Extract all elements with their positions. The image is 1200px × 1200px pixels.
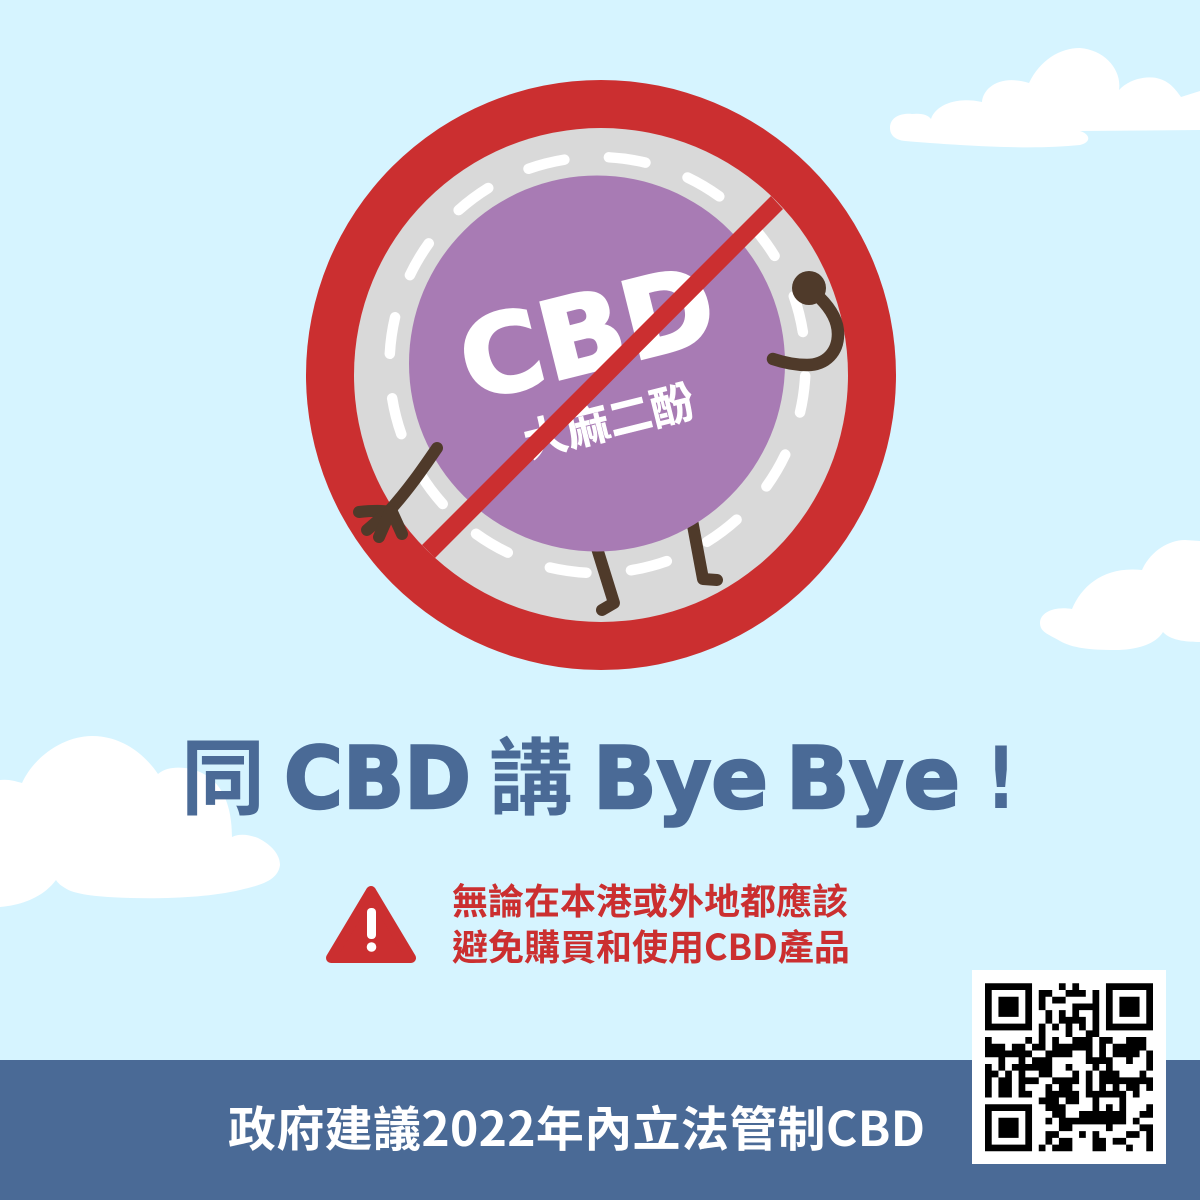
banner text: 政府建議2022年內立法管制CBD bbox=[228, 1090, 925, 1160]
QR code bbox=[972, 970, 1166, 1164]
red slash bbox=[422, 196, 783, 558]
cloud: top right bbox=[890, 48, 1200, 147]
title: Bye bbox=[593, 729, 768, 829]
dashed white ring bbox=[379, 146, 816, 584]
bottom banner bbox=[0, 1060, 1200, 1200]
Chinese label: cannabidiol: 大麻二酚 bbox=[516, 366, 700, 470]
sign: grey inner disc bbox=[354, 128, 848, 622]
character legs bbox=[596, 520, 717, 610]
title: 講 bbox=[489, 712, 573, 833]
character left arm with hand bbox=[359, 448, 437, 537]
character body: purple disc bbox=[409, 176, 785, 552]
icon: warning triangle bbox=[331, 891, 411, 958]
character right arm with fist bbox=[773, 271, 838, 365]
warning text: 無論在本港或外地都應該 bbox=[452, 873, 848, 925]
title bbox=[181, 712, 1016, 833]
title: ! bbox=[986, 729, 1016, 829]
warning text bbox=[452, 873, 850, 971]
title: CBD bbox=[284, 729, 471, 829]
warning text: 避免購買和使用CBD產品 bbox=[452, 919, 850, 971]
cloud: left bbox=[0, 736, 280, 907]
cloud: right bbox=[1040, 540, 1200, 650]
sign: red ring bbox=[306, 80, 896, 670]
title: 同 bbox=[181, 712, 265, 833]
CBD label: CBD bbox=[447, 243, 728, 426]
title: Bye bbox=[786, 729, 960, 829]
prohibition sign with CBD character bbox=[306, 80, 896, 670]
